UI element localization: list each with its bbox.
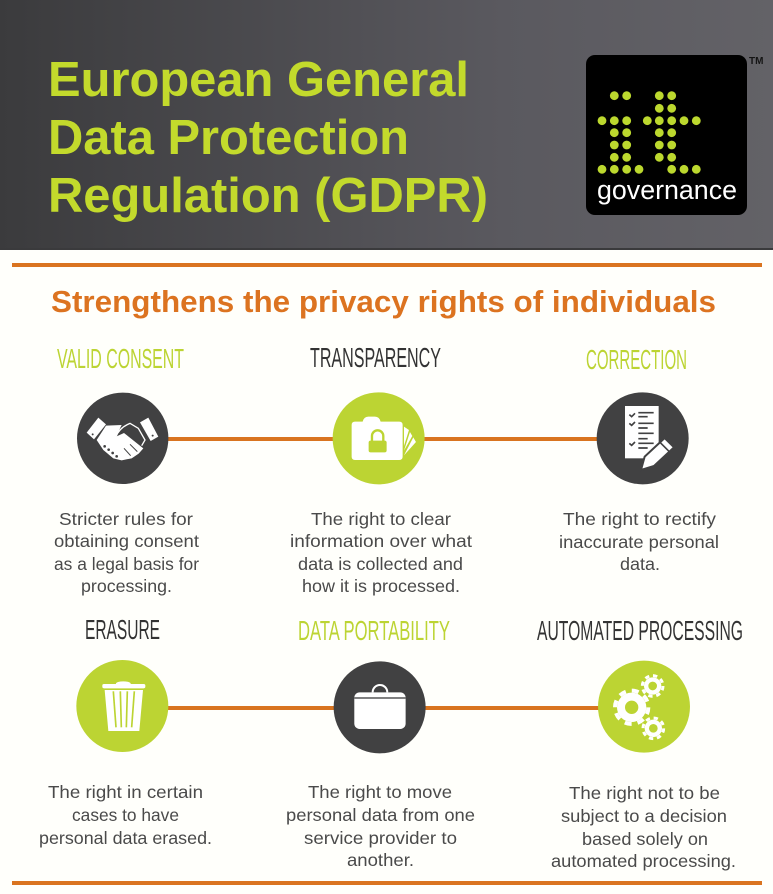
connector row 2: [122, 706, 644, 710]
panel: data portability: DATA PORTABILITY: [298, 615, 450, 646]
description: based solely on: [582, 829, 708, 849]
panel: correction: [559, 344, 719, 574]
panel: erasure: [39, 614, 212, 848]
title: European General: [48, 53, 469, 107]
description: Stricter rules for: [59, 509, 193, 529]
panel: transparency: [290, 342, 472, 596]
panel: correction: CORRECTION: [586, 344, 687, 375]
panel: transparency: TRANSPARENCY: [310, 342, 441, 373]
connector row 1: [122, 437, 644, 441]
description: cases to have: [72, 805, 179, 825]
logo: IT Governance: [586, 55, 763, 215]
icon: waste bin: [76, 660, 168, 752]
panel: automated processing: [537, 615, 743, 871]
title: Regulation (GDPR): [48, 169, 488, 223]
description: [286, 782, 475, 870]
header banner: [0, 0, 773, 250]
icon: handshake: [77, 393, 168, 484]
description: as a legal basis for: [54, 554, 199, 574]
title: [48, 53, 488, 223]
description: data.: [620, 554, 660, 574]
description: how it is processed.: [302, 576, 460, 596]
description: [39, 782, 212, 848]
icon: locked folder: [333, 392, 425, 484]
description: [290, 509, 472, 596]
title: Data Protection: [48, 111, 409, 165]
panel: erasure: ERASURE: [85, 614, 160, 645]
description: obtaining consent: [54, 531, 199, 551]
description: personal data from one: [286, 805, 475, 825]
description: another.: [347, 850, 414, 870]
description: The right in certain: [48, 782, 203, 802]
description: [54, 509, 199, 596]
panel: valid consent: VALID CONSENT: [57, 343, 184, 374]
description: [551, 783, 736, 871]
panel: data portability: [286, 615, 475, 870]
icon: checklist and pencil: [597, 392, 689, 484]
description: information over what: [290, 531, 472, 551]
logo: IT Governance: TM: [749, 56, 763, 67]
icon: gears: [598, 661, 690, 753]
description: inaccurate personal: [559, 532, 719, 552]
description: The right to clear: [311, 509, 451, 529]
description: service provider to: [304, 828, 457, 848]
description: The right not to be: [569, 783, 720, 803]
description: subject to a decision: [561, 806, 727, 826]
description: processing.: [81, 576, 172, 596]
description: The right to rectify: [563, 509, 716, 529]
icon: briefcase: [334, 661, 426, 753]
panel: valid consent: [54, 343, 199, 596]
logo: IT Governance: governance: [597, 175, 737, 205]
description: [559, 509, 719, 574]
description: The right to move: [308, 782, 452, 802]
description: automated processing.: [551, 851, 736, 871]
description: data is collected and: [298, 554, 463, 574]
description: personal data erased.: [39, 828, 212, 848]
section heading: Strengthens the privacy rights of individuals: [51, 284, 716, 319]
